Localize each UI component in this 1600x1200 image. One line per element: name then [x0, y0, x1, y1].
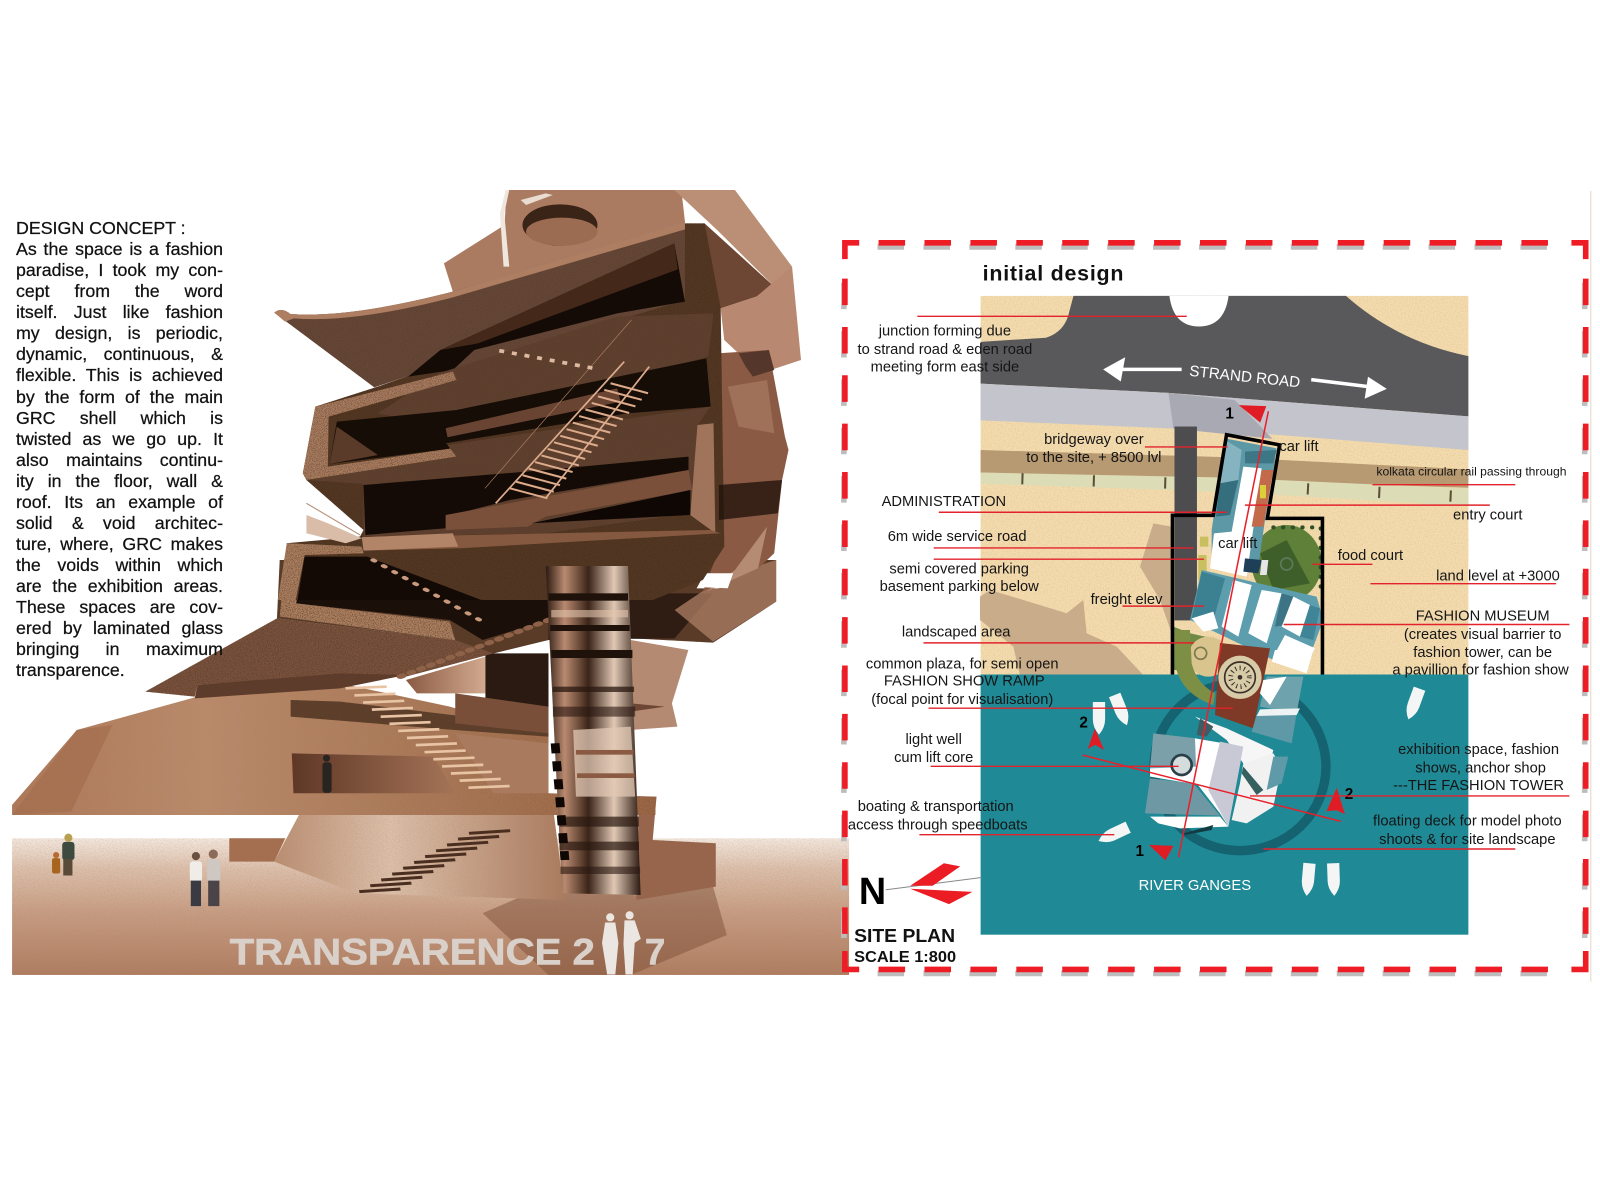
- annotation labels: cum lift core: [894, 750, 973, 766]
- small terrace steps: [306, 503, 362, 543]
- annotation labels: semi covered parking: [889, 561, 1029, 577]
- annotation labels: ADMINISTRATION: [882, 494, 1006, 510]
- rail embankment: [981, 450, 1468, 488]
- garden crescent: [1172, 630, 1215, 705]
- back room: [406, 657, 485, 693]
- lower stairs and core: [346, 560, 641, 895]
- river: [981, 674, 1468, 935]
- annotation labels: meeting form east side: [871, 359, 1019, 375]
- floor of upper level: [378, 313, 714, 428]
- ground shadow: [483, 880, 727, 975]
- design concept text: These spaces are cov-: [16, 597, 223, 617]
- administration block: [1210, 438, 1277, 577]
- site plan image: [980, 296, 1468, 935]
- annotation labels: car lift: [1218, 536, 1257, 552]
- fourth level top frame: [362, 530, 721, 551]
- design concept text: As the space is a fashion: [16, 239, 223, 259]
- design concept text: cept from the word: [16, 281, 223, 301]
- annotation labels: car lift: [1279, 439, 1319, 455]
- fourth level: [277, 560, 776, 653]
- design concept text: bringing in maximum: [16, 639, 223, 659]
- section lines and markers: 2: [1079, 715, 1088, 732]
- annotation labels: common plaza, for semi open: [866, 656, 1059, 672]
- under-croft: [274, 815, 565, 900]
- annotation labels: exhibition space, fashion: [1398, 742, 1559, 758]
- road and river labels: RIVER GANGES: [1139, 878, 1251, 894]
- top roof underside: [274, 222, 685, 387]
- site plan caption: SITE PLAN: [854, 925, 955, 946]
- glass wing: [631, 640, 688, 730]
- bridge approach: [1168, 393, 1272, 439]
- annotation labels: a pavillion for fashion show: [1392, 662, 1569, 678]
- person in the void: [322, 755, 332, 793]
- annotation labels: floating deck for model photo: [1373, 814, 1562, 830]
- floating deck ring: [1154, 683, 1326, 851]
- annotation labels: 6m wide service road: [888, 529, 1027, 545]
- third level floor: [306, 407, 711, 537]
- design concept text: my design, is periodic,: [16, 323, 223, 343]
- design concept text: itself. Just like fashion: [16, 302, 223, 322]
- boats: [1093, 687, 1425, 896]
- rendering: twisted GRC fashion tower: [12, 190, 849, 975]
- design concept text: paradise, I took my con-: [16, 260, 223, 280]
- annotation labels: entry court: [1453, 507, 1522, 523]
- section lines and markers: 2: [1345, 786, 1353, 803]
- site boundary: [1172, 435, 1322, 674]
- landscaped garden: [1173, 627, 1228, 677]
- design concept text: GRC shell which is: [16, 408, 223, 428]
- design concept text: DESIGN CONCEPT :: [16, 218, 186, 238]
- section lines and markers: 1: [1225, 405, 1234, 422]
- annotation labels: FASHION SHOW RAMP: [884, 674, 1045, 690]
- annotation labels: junction forming due: [878, 324, 1011, 340]
- design concept text: ture, where, GRC makes: [16, 534, 223, 554]
- lower tower and ground: [12, 560, 849, 975]
- design concept text: transparence.: [16, 660, 125, 680]
- translucent wings: [703, 350, 789, 592]
- stair: main flight: [346, 687, 510, 788]
- annotation labels: boating & transportation: [858, 799, 1014, 815]
- annotation labels: light well: [906, 732, 962, 748]
- food court: [1252, 525, 1322, 602]
- strand road: [981, 296, 1468, 416]
- annotation labels: to strand road & eden road: [858, 342, 1032, 358]
- section lines and markers: 1: [1136, 843, 1145, 860]
- stair: top flight: [499, 351, 599, 369]
- title: TRANSPARENCE 2007: TRANSPARENCE 2: [230, 931, 595, 972]
- third level void: [364, 457, 689, 535]
- second level void: [330, 358, 711, 464]
- site center: administration, food court, museum: [1173, 438, 1323, 677]
- annotation labels: access through speedboats: [848, 818, 1028, 834]
- head: [444, 190, 685, 292]
- river features: [1145, 630, 1326, 851]
- pavement: [981, 384, 1468, 450]
- heading: initial design: initial design: [983, 262, 1123, 286]
- annotation labels: kolkata circular rail passing through: [1376, 465, 1566, 479]
- annotation labels: freight elev: [1091, 592, 1163, 608]
- design concept text: are the exhibition areas.: [16, 576, 223, 596]
- white silhouettes: [602, 911, 641, 974]
- dashed red site boundary: [844, 243, 1586, 973]
- stair: chain flights: [373, 560, 549, 677]
- upper tower: [274, 190, 801, 600]
- fashion museum: [1190, 570, 1323, 670]
- site plan caption: SCALE 1:800: [854, 949, 956, 966]
- design concept text: [16, 218, 224, 680]
- annotation labels: FASHION MUSEUM: [1416, 608, 1550, 624]
- north arrow: N: [859, 870, 886, 912]
- annotation labels: to the site, + 8500 lvl: [1026, 450, 1161, 466]
- stair: upper ladder: [485, 320, 649, 503]
- leader lines: [917, 316, 1569, 849]
- design concept text: roof. Its an example of: [16, 492, 223, 512]
- design concept text: the voids within which: [16, 555, 223, 575]
- annotation labels: [848, 324, 1569, 848]
- sand: [981, 296, 1468, 676]
- design concept text: by the form of the main: [16, 386, 223, 406]
- design concept text: dynamic, continuous, &: [16, 344, 223, 364]
- ground plane: [12, 838, 849, 975]
- design concept text: flexible. This is achieved: [16, 365, 223, 385]
- design concept text: solid & void architec-: [16, 513, 223, 533]
- top void: [408, 243, 685, 377]
- visitors on the ground: [52, 834, 220, 906]
- parking: [1198, 537, 1208, 580]
- annotation labels: shoots & for site landscape: [1379, 832, 1556, 848]
- design concept text: also maintains continu-: [16, 450, 223, 470]
- road and river labels: [1139, 363, 1301, 894]
- site plan caption: [854, 925, 956, 966]
- design concept text: ity in the floor, wall &: [16, 471, 223, 491]
- annotation labels: fashion tower, can be: [1413, 645, 1552, 661]
- glass lift core: [546, 566, 641, 895]
- main dark mass: [281, 223, 724, 600]
- section lines and markers: [1079, 405, 1353, 860]
- north arrow: [859, 863, 982, 912]
- road notch: [1169, 296, 1229, 327]
- annotation labels: food court: [1338, 548, 1403, 564]
- annotation labels: (creates visual barrier to: [1404, 627, 1561, 643]
- annotation labels: ---THE FASHION TOWER: [1393, 778, 1564, 794]
- annotation labels: land level at +3000: [1436, 569, 1560, 585]
- annotation labels: landscaped area: [902, 625, 1011, 641]
- circular rail: [981, 472, 1468, 506]
- east pavilions: [1252, 650, 1313, 743]
- second level frame: [303, 372, 456, 480]
- design concept text: ered by laminated glass: [16, 618, 223, 638]
- design concept text: twisted as we go up. It: [16, 429, 223, 449]
- road direction arrows: [1104, 358, 1386, 398]
- annotation labels: bridgeway over: [1044, 432, 1144, 448]
- road and river labels: STRAND ROAD: [1188, 363, 1301, 391]
- annotation labels: basement parking below: [880, 579, 1039, 595]
- title: TRANSPARENCE 2007: 7: [645, 931, 665, 972]
- stair: ground flight: [359, 831, 510, 892]
- fashion tower: [1145, 717, 1288, 835]
- annotation labels: shows, anchor shop: [1415, 760, 1546, 776]
- service road: [1174, 427, 1197, 620]
- base mass: [12, 683, 655, 815]
- lower roof: [145, 618, 494, 697]
- common plaza with ramp: [1215, 643, 1270, 728]
- landscape patches: [980, 523, 1172, 675]
- annotation labels: (focal point for visualisation): [871, 692, 1053, 708]
- roof lip: [274, 222, 685, 322]
